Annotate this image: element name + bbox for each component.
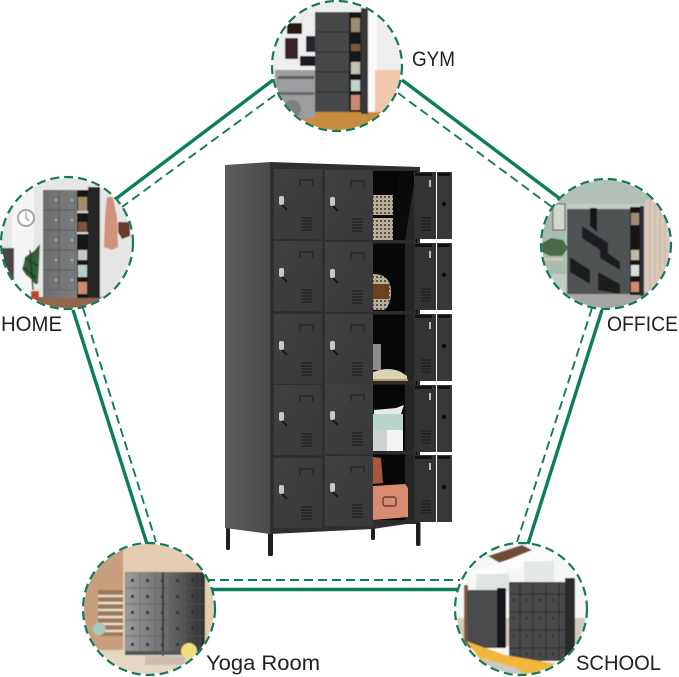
- label: Yoga Room: Yoga Room: [206, 652, 320, 675]
- gym dashed ring: [272, 1, 402, 131]
- scene: office: [538, 176, 675, 314]
- stored mint bag: [373, 405, 404, 451]
- locker side panel: [225, 162, 270, 534]
- label: SCHOOL: SCHOOL: [576, 652, 661, 675]
- office dashed ring: [541, 179, 671, 309]
- left door columns: [274, 169, 373, 528]
- school dashed ring: [455, 543, 587, 675]
- open doors: [414, 172, 452, 522]
- connecting lines: dashed pentagon: [83, 93, 592, 580]
- home dashed ring: [1, 177, 133, 309]
- connecting lines: solid pentagon: [73, 80, 602, 590]
- scene: yoga room: [82, 542, 217, 677]
- stored handbag: [373, 274, 391, 310]
- yoga dashed ring: [83, 543, 215, 675]
- stored orange bag and pink box: [373, 457, 408, 520]
- locker front frame: [270, 162, 420, 534]
- stored shoes and tray: [373, 344, 408, 381]
- scene: school: [454, 542, 589, 677]
- label: GYM: GYM: [412, 48, 455, 71]
- locker legs: [226, 522, 420, 556]
- central locker cabinet: [225, 162, 452, 556]
- label: HOME: HOME: [1, 313, 62, 336]
- open compartment interior: [373, 171, 417, 524]
- scene: gym: [270, 0, 405, 137]
- stored woven boxes: [373, 195, 393, 240]
- scene: home: [0, 175, 135, 313]
